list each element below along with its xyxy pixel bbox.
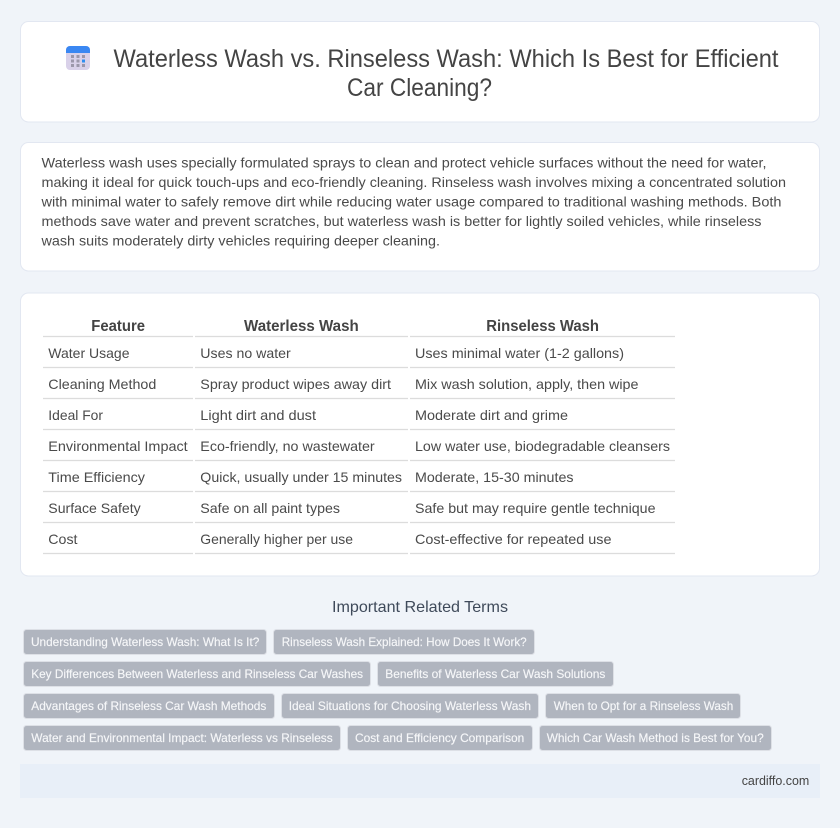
- row: environmental impact: Low water use, biodegradable cleansers: [415, 438, 670, 454]
- row: water usage: Water Usage: [48, 345, 130, 361]
- tag: Water and Environmental Impact: Waterless vs Rinseless: [31, 731, 333, 745]
- text block: summary: wash suits moderately dirty vehicles requiring deeper cleaning.: [40, 232, 440, 248]
- tag: [274, 630, 534, 654]
- row: time efficiency: Time Efficiency: [48, 469, 145, 485]
- row: surface safety: [48, 500, 656, 516]
- panel: summary paragraph: [20, 142, 820, 271]
- row: ideal for: [48, 407, 568, 423]
- tags: related terms: [24, 630, 772, 750]
- row: ideal for: Moderate dirt and grime: [415, 407, 568, 423]
- tag: Benefits of Waterless Car Wash Solutions: [385, 667, 605, 681]
- row: cleaning method: Mix wash solution, apply, then wipe: [415, 376, 639, 392]
- row: time efficiency: Moderate, 15-30 minutes: [415, 469, 574, 485]
- row: cleaning method: [48, 376, 639, 392]
- tag: Which Car Wash Method is Best for You?: [547, 731, 764, 745]
- row: environmental impact: Environmental Impact: [48, 438, 188, 454]
- table header: [91, 318, 599, 335]
- title: Waterless Wash vs. Rinseless Wash: Which Is Best for Efficient: [114, 45, 779, 73]
- tag: [24, 662, 370, 686]
- tag: [378, 662, 614, 686]
- header panel: [20, 22, 820, 122]
- tag: Advantages of Rinseless Car Wash Methods: [31, 699, 266, 713]
- heading: important related terms: Important Related Terms: [332, 599, 508, 616]
- row: environmental impact: Eco-friendly, no wastewater: [200, 438, 375, 454]
- footer: [20, 764, 820, 798]
- row: ideal for: Light dirt and dust: [200, 407, 316, 423]
- tag: Understanding Waterless Wash: What Is It?: [31, 635, 260, 649]
- title: Car Cleaning?: [347, 74, 492, 102]
- footer credit: cardiffo.com: [742, 773, 809, 788]
- row: time efficiency: [48, 469, 574, 485]
- row: surface safety: Surface Safety: [48, 500, 141, 516]
- row: cleaning method: Cleaning Method: [48, 376, 156, 392]
- table header: Rinseless Wash: [486, 318, 599, 335]
- tag: Ideal Situations for Choosing Waterless Wash: [289, 699, 531, 713]
- table header: Feature: [91, 318, 145, 335]
- tag: [546, 694, 740, 718]
- row: ideal for: Ideal For: [48, 407, 103, 423]
- text block: summary: Waterless wash uses specially formulated sprays to clean and protect vehicle surfaces without the need for water,: [42, 154, 766, 170]
- row: cleaning method: Spray product wipes away dirt: [200, 376, 391, 392]
- row: time efficiency: Quick, usually under 15 minutes: [200, 469, 402, 485]
- tag: [540, 726, 772, 750]
- icon: calendar: [66, 46, 90, 70]
- text block: summary: [40, 154, 786, 248]
- text block: summary: with minimal water to safely remove dirt while reducing water usage compared to traditional washing methods. Both: [40, 194, 781, 210]
- row: surface safety: Safe but may require gentle technique: [415, 500, 656, 516]
- row: surface safety: Safe on all paint types: [200, 500, 340, 516]
- row: environmental impact: [48, 438, 670, 454]
- tag: When to Opt for a Rinseless Wash: [554, 699, 733, 713]
- tag: Rinseless Wash Explained: How Does It Work?: [282, 635, 527, 649]
- tag: Cost and Efficiency Comparison: [355, 731, 524, 745]
- row: cost: [48, 531, 612, 547]
- title: [114, 45, 779, 102]
- row: cost: Cost-effective for repeated use: [415, 531, 612, 547]
- tag: [24, 630, 266, 654]
- table header: Waterless Wash: [244, 318, 359, 335]
- tag: [282, 694, 538, 718]
- row: water usage: Uses minimal water (1-2 gallons): [415, 345, 624, 361]
- row: water usage: Uses no water: [200, 345, 291, 361]
- tag: [24, 726, 340, 750]
- row: cost: Generally higher per use: [200, 531, 353, 547]
- text block: summary: making it ideal for quick touch-ups and eco-friendly cleaning. Rinseless wash involves mixing a concentrated solution: [42, 174, 786, 190]
- tag: [24, 694, 274, 718]
- text block: summary: methods save water and prevent scratches, but waterless wash is better for lightly soiled vehicles, while rinseless: [42, 213, 762, 229]
- panel: comparison table: [20, 293, 820, 576]
- tag: Key Differences Between Waterless and Rinseless Car Washes: [31, 667, 363, 681]
- row: water usage: [48, 345, 624, 361]
- tag: [348, 726, 532, 750]
- row: cost: Cost: [48, 531, 78, 547]
